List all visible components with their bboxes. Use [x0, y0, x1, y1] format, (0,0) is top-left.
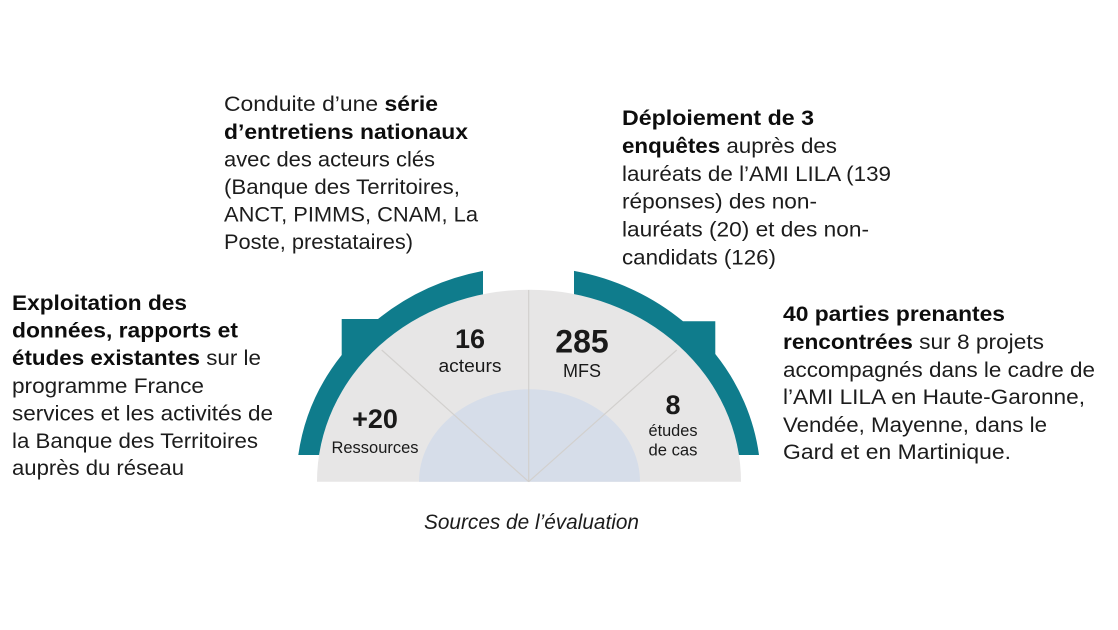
text block: exploitation des données: la Banque des Territoires — [12, 429, 258, 453]
text block: parties prenantes: l’AMI LILA en Haute-Garonne, — [783, 385, 1085, 409]
stat: 8 études de cas: de cas — [648, 440, 698, 460]
text block: déploiement de 3 enquêtes: enquêtes auprès des — [622, 134, 837, 158]
text block: exploitation des données: Exploitation des — [12, 291, 187, 315]
stat: 8 études de cas: 8 — [665, 390, 681, 420]
stat: 16 acteurs — [438, 324, 502, 376]
text block: entretiens nationaux: ANCT, PIMMS, CNAM, La — [224, 202, 478, 226]
text block: entretiens nationaux: (Banque des Territoires, — [224, 175, 460, 199]
text block: parties prenantes: Gard et en Martinique. — [783, 440, 1011, 464]
text block: déploiement de 3 enquêtes: lauréats (20) et des non- — [622, 218, 869, 242]
text block: exploitation des données — [12, 291, 273, 480]
text block: parties prenantes: rencontrées sur 8 projets — [783, 330, 1044, 354]
text block: entretiens nationaux: Poste, prestataires) — [224, 230, 413, 254]
stat: 8 études de cas — [648, 390, 698, 460]
blue inner half disc — [419, 389, 640, 482]
right teal arc — [574, 271, 759, 455]
text block: déploiement de 3 enquêtes: Déploiement de 3 — [622, 106, 814, 130]
text block: parties prenantes — [783, 302, 1095, 464]
stat: 285 MFS: MFS — [563, 361, 601, 381]
text block: entretiens nationaux — [224, 92, 478, 254]
text block: parties prenantes: Vendée, Mayenne, dans le — [783, 413, 1047, 437]
text block: déploiement de 3 enquêtes — [622, 106, 891, 270]
text block: déploiement de 3 enquêtes: candidats (126) — [622, 246, 776, 270]
semicircle diagram — [298, 271, 759, 482]
text block: exploitation des données: données, rapports et — [12, 318, 238, 342]
stat: 8 études de cas: études — [648, 421, 698, 440]
caption: Sources de l’évaluation — [424, 510, 639, 534]
left teal arc — [298, 271, 483, 455]
text block: exploitation des données: services et les activités de — [12, 402, 273, 426]
segment dividers — [382, 290, 677, 482]
stat: +20 Ressources: Ressources — [332, 438, 418, 457]
stat: 16 acteurs: acteurs — [438, 356, 502, 376]
text block: exploitation des données: auprès du réseau — [12, 456, 184, 480]
text block: déploiement de 3 enquêtes: lauréats de l’AMI LILA (139 — [622, 162, 891, 186]
stat: 285 MFS — [555, 324, 609, 381]
stat: 285 MFS: 285 — [555, 324, 609, 360]
text block: entretiens nationaux: d’entretiens nationaux — [224, 120, 468, 144]
grey half disc — [317, 290, 741, 482]
text block: exploitation des données: études existantes sur le — [12, 346, 261, 370]
stat: +20 Ressources: +20 — [352, 404, 398, 434]
stat: 16 acteurs: 16 — [455, 324, 485, 354]
text block: déploiement de 3 enquêtes: réponses) des non- — [622, 190, 817, 214]
text block: entretiens nationaux: avec des acteurs clés — [224, 148, 435, 172]
text block: parties prenantes: accompagnés dans le cadre de — [783, 358, 1095, 382]
text block: parties prenantes: 40 parties prenantes — [783, 302, 1005, 326]
text block: exploitation des données: programme France — [12, 374, 204, 398]
stat: +20 Ressources — [332, 404, 418, 457]
text block: entretiens nationaux: Conduite d’une série — [224, 92, 438, 116]
